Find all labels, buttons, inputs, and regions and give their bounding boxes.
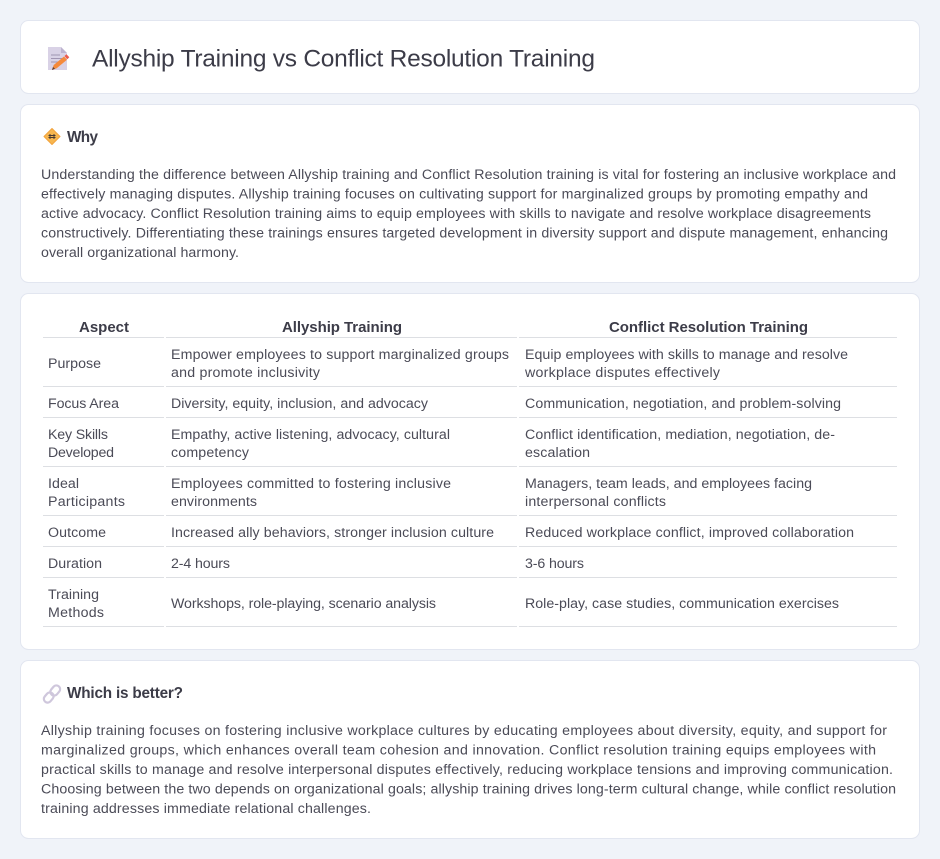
row: training methods: Role-play, case studies, communication exercises (525, 596, 839, 612)
paragraph: which is better: training addresses immediate relational challenges. (41, 801, 371, 817)
panel: header (20, 20, 920, 94)
row: focus area: Focus Area (48, 396, 119, 412)
paragraph: why: Understanding the difference between Allyship training and Conflict Resolution training is vital for fostering an inclusive workplace and (41, 167, 896, 183)
row: key skills developed: Developed (48, 445, 114, 461)
row: outcome (48, 525, 854, 541)
icon: diamond sign (44, 128, 60, 144)
row: duration: 3-6 hours (525, 556, 584, 572)
icon: document with pencil (48, 47, 69, 70)
paragraph: which is better: Allyship training focuses on fostering inclusive workplace cultures by educating employees about diversity, equity, and support for (41, 723, 887, 739)
paragraph: which is better: marginalized groups, which enhances overall team cohesion and innovation. Conflict resolution training equips employees with (41, 742, 876, 758)
paragraph: why: active advocacy. Conflict Resolution training aims to equip employees with skills to navigate and resolve workplace disagreements (41, 206, 871, 222)
row: ideal participants: Participants (48, 494, 125, 510)
row: focus area (48, 396, 841, 412)
table header row: Allyship Training (282, 319, 402, 336)
table rules (43, 337, 897, 627)
panel: comparison table (20, 294, 920, 650)
row: ideal participants: Employees committed to fostering inclusive (171, 476, 451, 492)
row: ideal participants: interpersonal conflicts (525, 494, 666, 510)
table header row: Conflict Resolution Training (609, 319, 808, 336)
row: training methods: Training (48, 587, 99, 603)
row: focus area: Communication, negotiation, and problem-solving (525, 396, 841, 412)
row: key skills developed: Empathy, active listening, advocacy, cultural (171, 427, 450, 443)
table header row: Aspect (79, 319, 129, 336)
table header row (79, 319, 808, 336)
row: purpose: workplace disputes effectively (524, 365, 721, 381)
row: training methods: Workshops, role-playing, scenario analysis (171, 596, 436, 612)
paragraph: which is better (41, 723, 896, 817)
row: training methods (48, 587, 839, 621)
row: ideal participants: environments (171, 494, 257, 510)
row: purpose: and promote inclusivity (171, 365, 321, 381)
paragraph: which is better: Choosing between the two depends on organizational goals; allyship training drives long-term cultural change, while conflict resolution (41, 782, 896, 798)
panel: which is better (20, 660, 920, 838)
heading: why: Why (67, 129, 98, 146)
row: outcome: Increased ally behaviors, stronger inclusion culture (171, 525, 494, 541)
paragraph: why: effectively managing disputes. Allyship training focuses on cultivating support for marginalized groups by promoting empathy and (41, 186, 868, 202)
row: outcome: Outcome (48, 525, 106, 541)
row: key skills developed (48, 427, 835, 461)
paragraph: which is better: practical skills to manage and resolve interpersonal disputes effectively, reducing workplace tensions and improving communication. (41, 762, 893, 778)
row: outcome: Reduced workplace conflict, improved collaboration (525, 525, 854, 541)
icon: chain link (42, 684, 62, 704)
row: purpose: Equip employees with skills to manage and resolve (525, 347, 848, 363)
row: key skills developed: Conflict identification, mediation, negotiation, de- (525, 427, 835, 443)
row: focus area: Diversity, equity, inclusion, and advocacy (171, 396, 429, 412)
row: duration: 2-4 hours (171, 556, 230, 572)
row: purpose: Purpose (48, 356, 101, 372)
title: Allyship Training vs Conflict Resolution Training (92, 46, 595, 72)
paragraph: why (41, 167, 896, 261)
panel: why (20, 104, 920, 282)
row: purpose (48, 347, 848, 381)
row: key skills developed: escalation (525, 445, 590, 461)
row: ideal participants: Managers, team leads, and employees facing (525, 476, 812, 492)
row: ideal participants: Ideal (48, 476, 79, 492)
row: ideal participants (48, 476, 812, 510)
row: duration (48, 556, 584, 572)
paragraph: why: overall organizational harmony. (41, 245, 239, 261)
row: training methods: Methods (48, 605, 104, 621)
row: key skills developed: Key Skills (48, 427, 108, 443)
heading: which is better: Which is better? (67, 685, 183, 702)
paragraph: why: constructively. Differentiating these trainings ensures targeted development in diversity support and dispute management, enhancing (41, 226, 888, 242)
row: duration: Duration (48, 556, 102, 572)
row: key skills developed: competency (171, 445, 250, 461)
row: purpose: Empower employees to support marginalized groups (171, 347, 509, 363)
